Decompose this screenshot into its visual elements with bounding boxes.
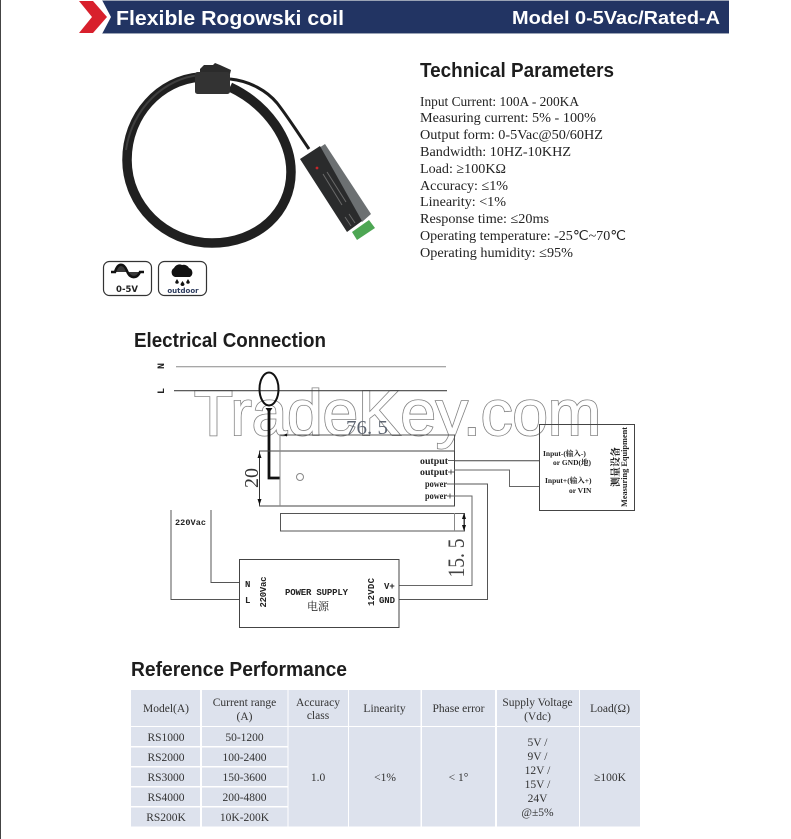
table values: @±5% xyxy=(521,807,554,819)
table header labels: (A) xyxy=(237,711,253,723)
table values: 5V / xyxy=(528,737,548,749)
heading: electrical connection: Electrical Connection xyxy=(134,330,326,352)
signal and power wires xyxy=(399,461,539,600)
icon: outdoor rain badge: outdoor xyxy=(167,287,199,295)
coil around L with lead xyxy=(260,372,280,478)
table values: 10K-200K xyxy=(220,812,270,824)
table values: RS4000 xyxy=(147,792,185,804)
table header labels: Supply Voltage xyxy=(502,697,573,709)
measuring equipment box xyxy=(540,424,634,510)
header model: Model 0-5Vac/Rated-A xyxy=(512,7,720,28)
table header labels: (Vdc) xyxy=(524,711,551,723)
N and L conductors xyxy=(157,363,447,394)
table values: RS1000 xyxy=(147,732,185,744)
wiring diagram xyxy=(157,363,634,628)
terminal labels: power xyxy=(425,491,447,501)
clamp xyxy=(195,63,231,94)
heading: reference performance: Reference Performance xyxy=(131,659,347,681)
technical parameters list: Operating temperature: -25℃~70℃ xyxy=(420,229,626,244)
technical parameters list: Load: ≥100KΩ xyxy=(420,162,506,177)
measuring equipment box: Input+(输入+) xyxy=(545,475,592,485)
table values: RS200K xyxy=(146,812,187,824)
power supply box: V+ xyxy=(384,582,395,592)
table header labels: class xyxy=(307,710,330,722)
terminal labels xyxy=(420,456,454,501)
terminal labels: output xyxy=(420,456,448,466)
table values: RS2000 xyxy=(147,752,185,764)
power supply box: N xyxy=(245,580,250,590)
N and L conductors: N xyxy=(157,363,168,369)
power supply box xyxy=(240,560,399,628)
heading: technical parameters: Technical Parameters xyxy=(420,60,614,82)
dimension 76.5: 76. 5 xyxy=(346,417,388,439)
technical parameters list: Accuracy: ≤1% xyxy=(420,179,508,194)
table values: RS3000 xyxy=(147,772,185,784)
dimension 15.5: 15. 5 xyxy=(444,538,469,578)
mains input wires xyxy=(171,510,239,600)
technical parameters list: Input Current: 100A - 200KA xyxy=(420,95,580,110)
table header labels: Load(Ω) xyxy=(590,703,630,715)
measuring equipment box: or GND(地) xyxy=(553,457,591,467)
table header labels xyxy=(143,697,630,723)
table header labels: Linearity xyxy=(363,703,406,715)
table header labels: Model(A) xyxy=(143,703,189,715)
technical parameters list: Measuring current: 5% - 100% xyxy=(420,111,596,126)
dimension 20: 20 xyxy=(241,468,263,488)
mains input wires: 220Vac xyxy=(175,518,206,528)
icon: red chevron xyxy=(79,1,107,33)
technical parameters list xyxy=(420,95,626,261)
technical parameters list: Operating humidity: ≤95% xyxy=(420,246,573,261)
table values: 12V / xyxy=(525,765,551,777)
header banner xyxy=(79,0,729,34)
measuring equipment box: Measuring Equipment xyxy=(620,427,629,507)
transducer outline xyxy=(260,434,454,506)
table header row xyxy=(131,690,640,726)
table body cells xyxy=(131,727,640,826)
power supply box: 220Vac xyxy=(259,576,269,608)
module xyxy=(300,144,375,240)
table values xyxy=(146,732,627,824)
coil loop xyxy=(127,77,291,243)
power supply box: GND xyxy=(379,596,396,606)
technical parameters list: Output form: 0-5Vac@50/60HZ xyxy=(420,128,603,143)
terminal labels: output xyxy=(420,467,448,477)
N and L conductors: L xyxy=(157,388,168,394)
technical parameters list: Response time: ≤20ms xyxy=(420,212,549,227)
table values: 9V / xyxy=(528,751,548,763)
power supply box: POWER SUPPLY xyxy=(285,588,349,598)
power supply box: 电源 xyxy=(307,599,330,613)
table values: 150-3600 xyxy=(222,772,267,784)
thin lead cable xyxy=(230,79,309,149)
power supply box: L xyxy=(245,596,250,606)
measuring equipment box: 测量设备 xyxy=(609,447,622,487)
table values: 200-4800 xyxy=(222,792,267,804)
watermark: TradeKey.com: TradeKey.com xyxy=(194,377,601,449)
table values: 15V / xyxy=(525,779,551,791)
lower dimension strip xyxy=(280,513,466,531)
table values: 24V xyxy=(528,793,548,805)
table values: 100-2400 xyxy=(222,752,267,764)
table values: 1.0 xyxy=(311,772,325,784)
performance table xyxy=(131,690,640,826)
table values: 50-1200 xyxy=(225,732,264,744)
table values: < 1° xyxy=(449,772,469,784)
technical parameters list: Bandwidth: 10HZ-10KHZ xyxy=(420,145,571,160)
power supply box: 12VDC xyxy=(367,577,377,606)
icon: 0-5V waveform badge: 0-5V xyxy=(116,285,138,295)
table header labels: Accuracy xyxy=(296,697,340,709)
icon: 0-5V waveform badge xyxy=(104,262,152,296)
table values: ≥100K xyxy=(594,772,627,784)
icon: outdoor rain badge xyxy=(158,262,206,296)
watermark: TradeKey.com: TradeKey.com xyxy=(194,377,601,449)
product photo: Rogowski coil xyxy=(126,63,375,243)
dimension 20 xyxy=(241,452,263,505)
table header labels: Phase error xyxy=(432,703,485,715)
table header labels: Current range xyxy=(213,697,276,709)
terminal labels: power xyxy=(425,479,447,489)
table values: <1% xyxy=(374,772,396,784)
measuring equipment box: Input-(输入-) xyxy=(543,448,586,458)
measuring equipment box: or VIN xyxy=(569,486,592,495)
header title: Flexible Rogowski coil xyxy=(116,8,344,30)
technical parameters list: Linearity: <1% xyxy=(420,195,506,210)
